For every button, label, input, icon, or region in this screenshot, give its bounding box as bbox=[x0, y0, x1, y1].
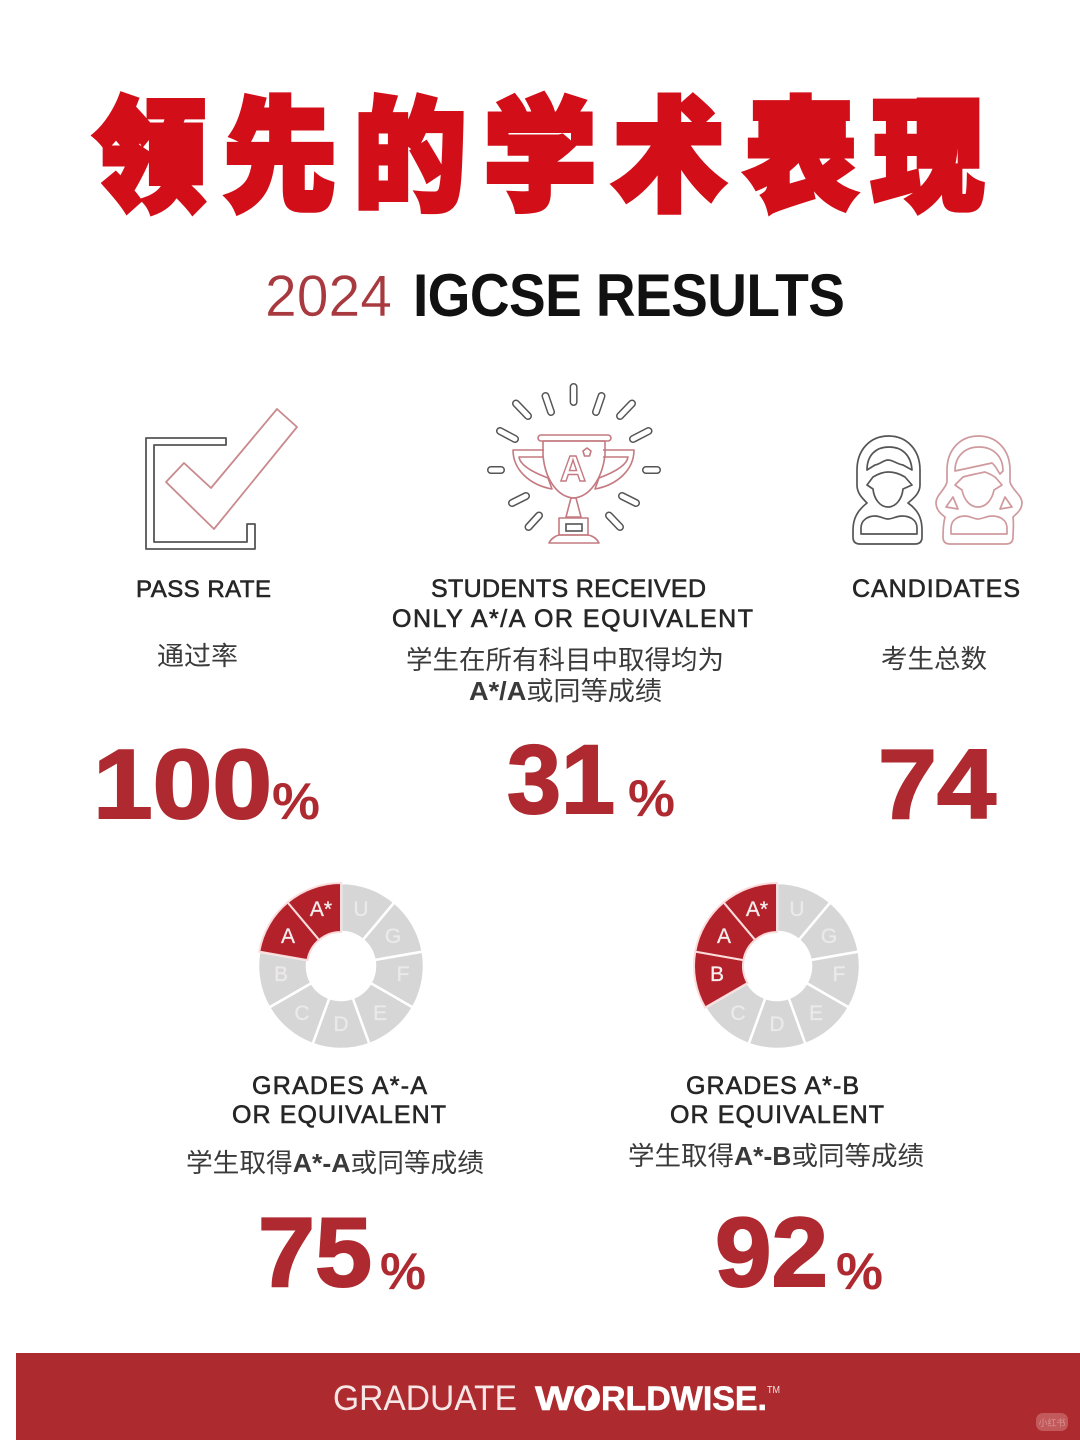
logo: Graduate Worldwise: TM bbox=[767, 1385, 780, 1396]
label: grades A*-B bbox=[670, 1072, 884, 1129]
heading: 2024 IGCSE results: 2024 bbox=[265, 264, 392, 329]
donut chart: A*-B highlighted bbox=[694, 883, 860, 1049]
value: 100%: % bbox=[272, 773, 320, 831]
icon: boy bbox=[853, 436, 922, 544]
value: 31%: % bbox=[628, 770, 675, 828]
donut chart: A*-A highlighted: B bbox=[274, 963, 288, 986]
icon: trophy with rays bbox=[491, 387, 657, 543]
donut chart: A*-A highlighted: D bbox=[333, 1013, 349, 1036]
label: students received Chinese: 学生在所有科目中取得均为 bbox=[406, 645, 724, 675]
donut chart: A*-A highlighted: E bbox=[373, 1002, 387, 1025]
panel: candidates bbox=[852, 436, 1022, 839]
label: grades A*-A bbox=[232, 1072, 446, 1129]
label: candidates Chinese: 考生总数 bbox=[881, 644, 987, 674]
value: 100%: 100 bbox=[93, 729, 272, 839]
donut chart: A*-B highlighted: A bbox=[717, 925, 731, 948]
logo: Graduate Worldwise bbox=[333, 1379, 780, 1418]
label: grades A*-A: GRADES A*-A bbox=[252, 1072, 427, 1100]
value: 31% bbox=[507, 725, 675, 834]
label: grades A*-B: GRADES A*-B bbox=[686, 1072, 859, 1100]
watermark: 小红书 bbox=[1038, 1417, 1066, 1428]
heading: 2024 IGCSE results: IGCSE RESULTS bbox=[413, 263, 845, 330]
panel: pass rate bbox=[93, 409, 320, 839]
watermark bbox=[1036, 1413, 1068, 1431]
donut chart: A*-B highlighted: E bbox=[809, 1002, 823, 1025]
icon: checkbox with tick bbox=[146, 409, 297, 549]
label: students received Chinese bbox=[406, 645, 724, 706]
value: 92%: % bbox=[836, 1243, 883, 1301]
donut chart: A*-A highlighted: A bbox=[281, 925, 295, 948]
icon: trophy with rays: A bbox=[560, 448, 586, 489]
logo: Graduate Worldwise: GRADUATE bbox=[333, 1379, 517, 1418]
label: candidates: CANDIDATES bbox=[852, 575, 1020, 603]
donut chart: A*-B highlighted: G bbox=[821, 925, 837, 948]
donut chart: A*-A highlighted bbox=[258, 883, 424, 1049]
label: students received: ONLY A*/A OR EQUIVALENT bbox=[392, 605, 753, 633]
panel: students received only A*/A bbox=[392, 387, 753, 834]
donut chart: A*-B highlighted: D bbox=[769, 1013, 785, 1036]
label: grades A*-B Chinese: 学生取得A*-B或同等成绩 bbox=[628, 1141, 924, 1171]
value: 74: 74 bbox=[878, 729, 996, 839]
value: 75%: % bbox=[380, 1243, 426, 1301]
donut chart: A*-A highlighted: F bbox=[397, 963, 409, 986]
value: 75%: 75 bbox=[258, 1197, 372, 1307]
label: students received bbox=[392, 575, 753, 633]
donut chart: A*-A highlighted: U bbox=[353, 898, 369, 921]
value: 92% bbox=[715, 1197, 883, 1307]
icon: girl bbox=[936, 436, 1022, 544]
donut chart: A*-A highlighted: G bbox=[385, 925, 401, 948]
footer band bbox=[16, 1353, 1080, 1440]
donut chart: A*-B highlighted: B bbox=[710, 963, 724, 986]
panel: grades A*-B bbox=[628, 883, 924, 1307]
panel: grades A*-A bbox=[186, 883, 484, 1307]
value: 92%: 92 bbox=[715, 1197, 828, 1307]
label: grades A*-A Chinese: 学生取得A*-A或同等成绩 bbox=[186, 1148, 484, 1178]
label: pass rate Chinese: 通过率 bbox=[157, 641, 238, 671]
title: 领先的学术表现 bbox=[94, 58, 984, 235]
donut chart: A*-B highlighted: U bbox=[789, 898, 805, 921]
donut chart: A*-B highlighted: C bbox=[730, 1002, 746, 1025]
donut chart: A*-B highlighted: F bbox=[833, 963, 845, 986]
donut chart: A*-A highlighted: C bbox=[294, 1002, 310, 1025]
value: 31%: 31 bbox=[507, 725, 615, 834]
label: grades A*-B: OR EQUIVALENT bbox=[670, 1101, 884, 1129]
donut chart: A*-B highlighted: A* bbox=[746, 898, 768, 921]
logo: Graduate Worldwise: RLDWISE. bbox=[601, 1380, 767, 1418]
logo: Graduate Worldwise: W bbox=[535, 1380, 575, 1418]
label: students received Chinese: A*/A或同等成绩 bbox=[469, 676, 662, 706]
label: students received: STUDENTS RECEIVED bbox=[431, 575, 706, 603]
donut chart: A*-A highlighted: A* bbox=[310, 898, 332, 921]
label: pass rate: PASS RATE bbox=[136, 576, 271, 603]
value: 75% bbox=[258, 1197, 426, 1307]
label: grades A*-A: OR EQUIVALENT bbox=[232, 1101, 446, 1129]
